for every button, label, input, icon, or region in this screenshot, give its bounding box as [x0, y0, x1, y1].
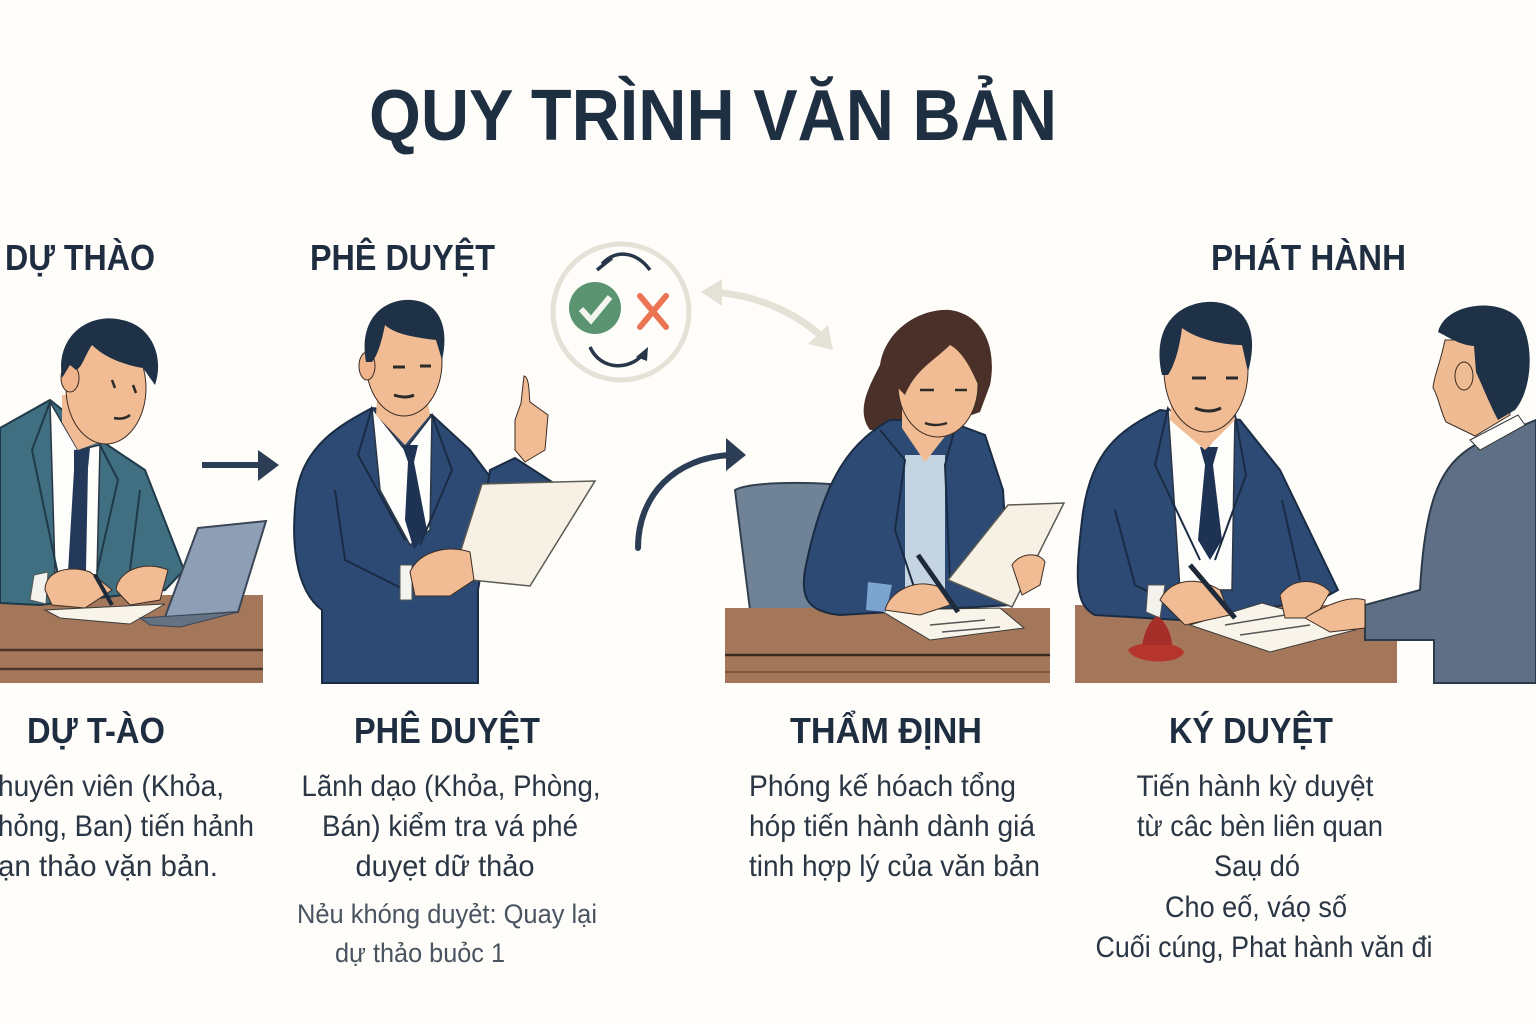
- text block: du thao description: ạn thảo vặn bản.: [0, 850, 218, 883]
- arrow: curved step 2 to 3: [638, 438, 746, 548]
- heading: top label du thao: DỰ THÀO: [5, 237, 155, 278]
- text block: ky duyet description: Tiến hành kỳ duyệt: [1136, 770, 1374, 803]
- text block: ky duyet description: [1096, 770, 1432, 964]
- icon: reject cross: [640, 296, 666, 327]
- icon: review cycle approve or reject: [553, 244, 689, 380]
- illustration: signing and handing over document: [1075, 302, 1536, 683]
- illustration: drafting officer at laptop: [0, 318, 266, 683]
- text block: ky duyet description: Cuối cúng, Phat hành văn đi: [1096, 931, 1432, 964]
- illustration: leader reviewing document: [294, 300, 595, 683]
- arrow: double arrow between review and appraisal: [701, 279, 833, 350]
- text block: ky duyet description: Cho eố, váọ số: [1165, 891, 1347, 924]
- heading: top label phat hanh: PHÁT HÀNH: [1211, 237, 1406, 278]
- note: rejection returns to step 1: Nẻu khóng duyẻt: Quay lại: [297, 899, 597, 929]
- heading: top label phe duyet: PHÊ DUYỆT: [310, 236, 495, 278]
- text block: du thao description: hỏng, Ban) tiến hảnh: [0, 810, 254, 843]
- caption heading: phe duyet: PHÊ DUYỆT: [354, 709, 540, 751]
- text block: tham dinh description: Phóng kế hóach tổng: [749, 770, 1016, 803]
- title: QUY TRÌNH VĂN BẢN: [369, 75, 1057, 156]
- text block: tham dinh description: tinh hợp lý của văn bản: [749, 850, 1040, 883]
- caption heading: du thao: DỰ T-ÀO: [27, 710, 165, 751]
- illustration: appraiser woman at desk: [725, 310, 1064, 683]
- text block: du thao description: [0, 770, 254, 883]
- icon: approve check: [569, 282, 621, 334]
- text block: du thao description: huyên viên (Khỏa,: [0, 770, 224, 803]
- text block: ky duyet description: từ câc bèn liên quan: [1137, 810, 1383, 843]
- text block: ky duyet description: Saụ dó: [1214, 850, 1300, 883]
- text block: phe duyet description: [302, 770, 600, 883]
- arrow: step 1 to 2: [202, 450, 279, 481]
- caption heading: ky duyet: KÝ DUYỆT: [1169, 709, 1333, 751]
- note: rejection returns to step 1: [297, 899, 597, 968]
- text block: phe duyet description: duyẹt dữ thảo: [356, 850, 534, 883]
- text block: tham dinh description: [749, 770, 1040, 883]
- text block: phe duyet description: Lãnh dạo (Khỏa, Phòng,: [302, 770, 600, 803]
- note: rejection returns to step 1: dự thảo buỏc 1: [335, 938, 505, 968]
- text block: phe duyet description: Bán) kiểm tra vá phé: [322, 810, 578, 843]
- text block: tham dinh description: hóp tiến hành dành giá: [749, 810, 1035, 843]
- caption heading: tham dinh: THẨM ĐỊNH: [790, 709, 982, 751]
